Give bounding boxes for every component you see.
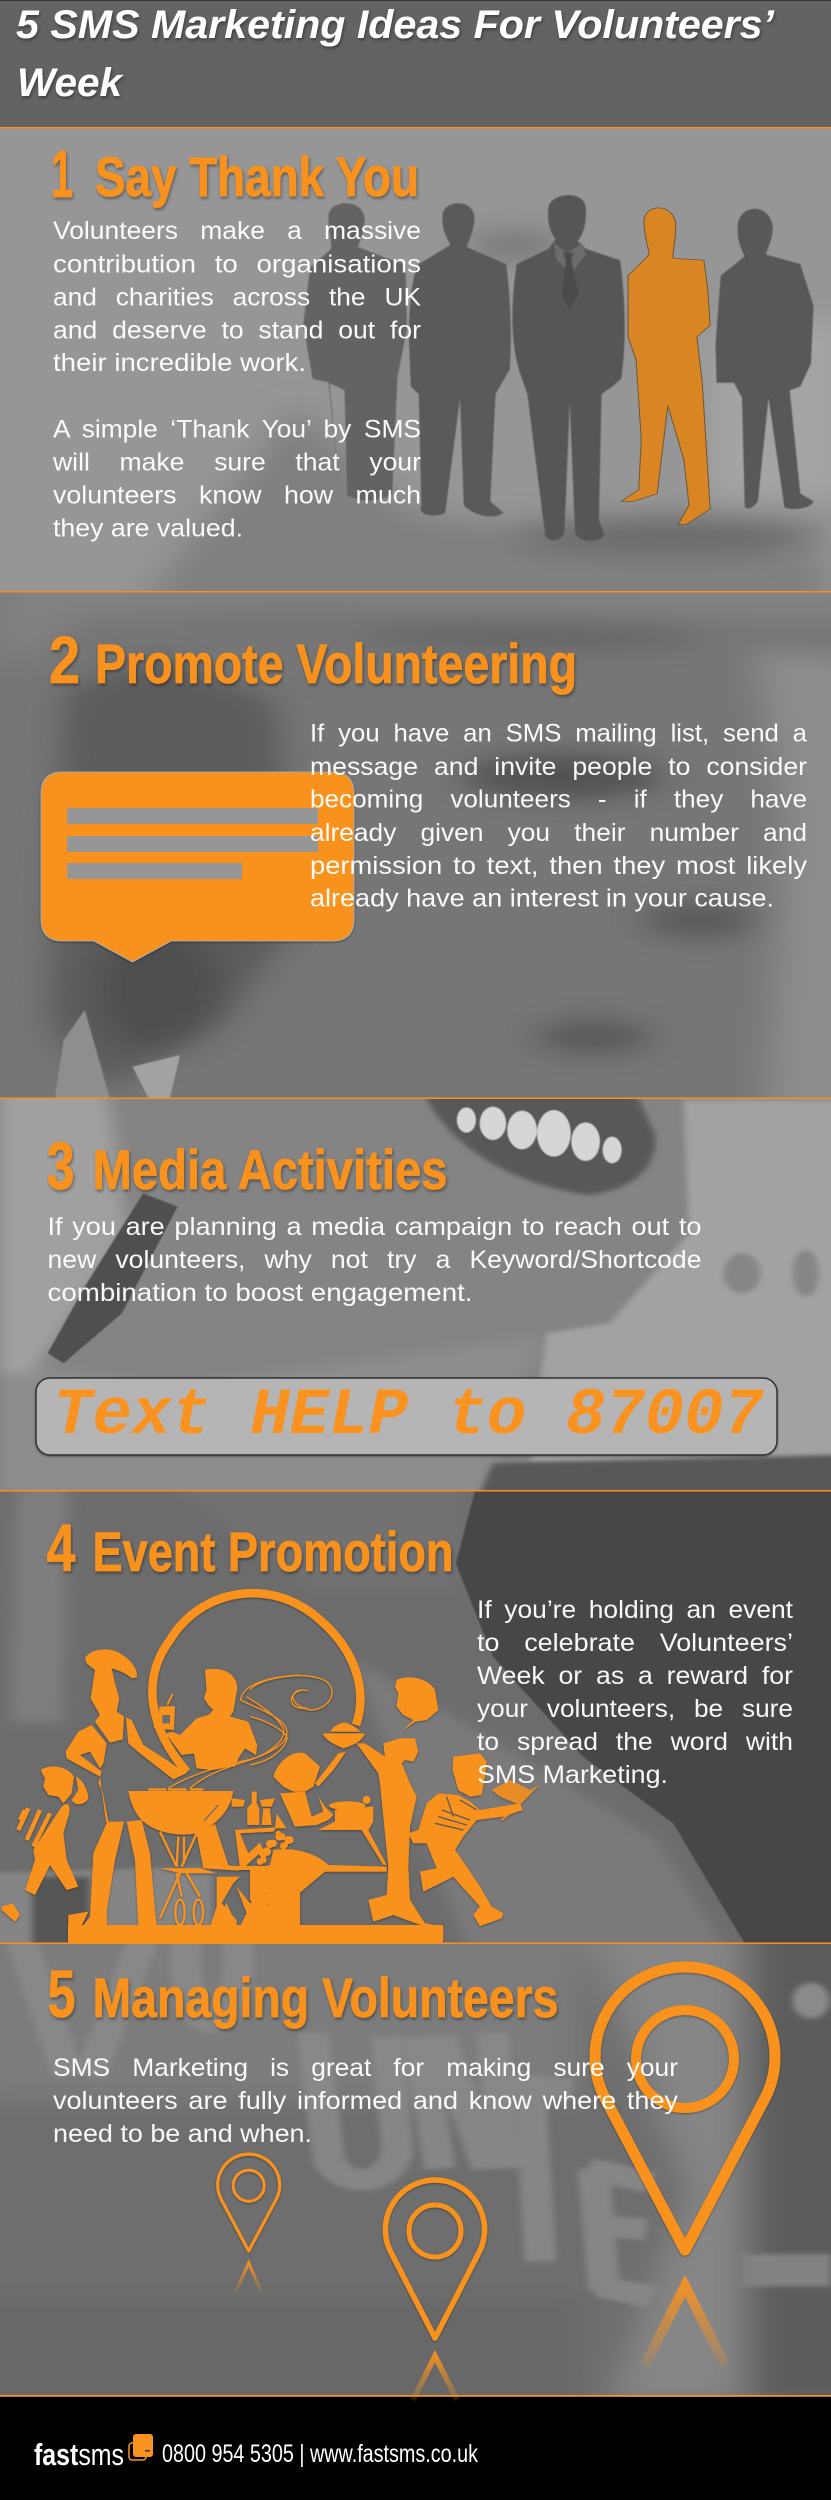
text block 1: contribution to organisations <box>53 250 421 278</box>
panel: 5 managing volunteers <box>0 1944 831 2397</box>
heading 1: Say Thank You <box>95 145 419 208</box>
text block 4: to celebrate Volunteers’ <box>477 1629 793 1657</box>
text block 4: to spread the word with <box>477 1728 793 1756</box>
panel: 4 event promotion <box>0 1473 831 1973</box>
callout: keyword box: Text HELP to 87007 <box>53 1378 764 1453</box>
illustration: barbecue scene <box>2 1593 539 1943</box>
ring arc <box>152 1593 360 1772</box>
heading 4: Event Promotion <box>92 1520 454 1583</box>
heading: 5 SMS Marketing Ideas For Volunteers’ <box>16 3 775 47</box>
text block 3: new volunteers, why not try a Keyword/Shortcode <box>48 1246 702 1274</box>
icon: medium pin reflection <box>413 2356 457 2400</box>
text block 3: If you are planning a media campaign to reach out to <box>48 1213 702 1241</box>
text block 4: Week or as a reward for <box>477 1662 793 1690</box>
text block 5: need to be and when. <box>53 2120 312 2148</box>
heading 3 <box>47 1142 448 1194</box>
heading <box>16 3 775 105</box>
heading 1: 1 <box>51 137 73 212</box>
text block 4: If you’re holding an event <box>477 1596 793 1624</box>
heading: Week <box>17 61 124 105</box>
text block 3: combination to boost engagement. <box>48 1279 472 1307</box>
heading 4: 4 <box>46 1511 76 1586</box>
heading 2: 2 <box>49 623 80 698</box>
heading 5: Managing Volunteers <box>92 1966 558 2029</box>
text block 1: their incredible work. <box>53 349 306 377</box>
text block 2: becoming volunteers - if they have <box>310 786 807 814</box>
text block 4: your volunteers, be sure <box>477 1695 793 1723</box>
heading 1 <box>52 150 419 212</box>
text block 2: already given you their number and <box>310 819 807 847</box>
shirt lettering background <box>21 1901 652 2297</box>
orange figure <box>621 208 710 524</box>
text block 2: permission to text, then they most likely <box>310 852 808 880</box>
panel: 3 media activities <box>0 1083 831 1500</box>
panel: 2 promote volunteering <box>0 592 831 1098</box>
text block 4: SMS Marketing. <box>477 1761 668 1789</box>
heading 5 <box>48 1970 560 2032</box>
icon: speech bubble <box>41 772 354 962</box>
heading 3: 3 <box>46 1129 74 1204</box>
text block 2: If you have an SMS mailing list, send a <box>310 720 807 748</box>
logo: fastsms: fastsms <box>34 2437 124 2472</box>
text block 2: already have an interest in your cause. <box>310 885 774 913</box>
left half figures <box>2 1649 300 1927</box>
heading 5: 5 <box>48 1957 76 2032</box>
icon: medium map pin <box>385 2180 485 2338</box>
text block 5 <box>53 2054 679 2148</box>
text block 5: SMS Marketing is great for making sure your <box>53 2054 678 2082</box>
heading 2 <box>50 636 576 698</box>
heading 3: Media Activities <box>92 1138 448 1201</box>
silhouettes group <box>303 195 814 541</box>
text block 3 <box>48 1213 702 1307</box>
text block 2: message and invite people to consider <box>310 753 807 781</box>
panel: title header <box>0 0 831 128</box>
mouth <box>424 1093 655 1195</box>
text block 1: volunteers know how much <box>53 482 421 510</box>
text block 5: volunteers are fully informed and know where they <box>53 2087 679 2115</box>
face edge and background <box>530 1100 831 1463</box>
icon: small map pin <box>218 2154 280 2251</box>
icon: large map pin <box>595 1967 775 2250</box>
icon: small pin reflection <box>236 2263 261 2291</box>
panel: 1 say thank you <box>0 128 831 612</box>
text block 2 <box>310 720 808 913</box>
heading 4 <box>46 1524 454 1575</box>
base <box>68 1925 443 1943</box>
text block 1: they are valued. <box>53 514 243 542</box>
text block 1: and charities across the UK <box>53 284 421 312</box>
text block 1: will make sure that your <box>52 449 421 477</box>
text block 1 <box>52 217 421 542</box>
text block 4 <box>477 1596 793 1789</box>
footer <box>0 2397 831 2500</box>
text block 1: A simple ‘Thank You’ by SMS <box>53 415 421 443</box>
text block 1: Volunteers make a massive <box>53 217 421 245</box>
heading 2: Promote Volunteering <box>95 632 577 695</box>
text block 1: and deserve to stand out for <box>53 317 421 345</box>
right half figures <box>250 1676 539 1940</box>
contact details: 0800 954 5305 | www.fastsms.co.uk <box>162 2440 478 2468</box>
icon: large pin reflection <box>645 2286 725 2365</box>
